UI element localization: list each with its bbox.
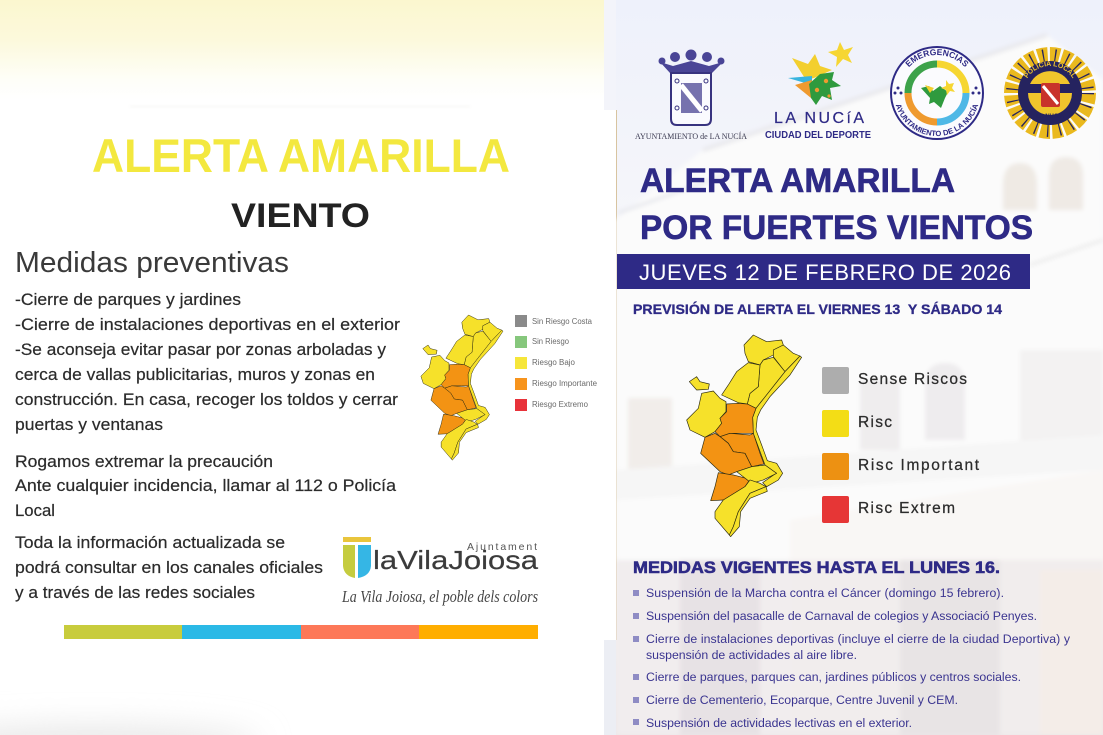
date banner [617, 254, 1030, 289]
measures list: suspensión de actividades al aire libre. [646, 648, 857, 662]
colour stripe [64, 625, 538, 639]
left map legend: Riesgo Extremo [532, 400, 589, 409]
logo: Emergencias badge: AYUNTAMIENTO DE LA NUCÍA [896, 105, 978, 136]
left map legend: Riesgo Importante [532, 379, 598, 388]
right map legend: Risc Extrem [858, 500, 955, 517]
left text block: official channels: y a través de las redes sociales [15, 584, 255, 602]
icon: shield [671, 73, 711, 125]
panel: left bottom grey shadow [0, 727, 260, 735]
left text block: measures list: -Cierre de parques y jardines [15, 291, 241, 309]
left map legend: Sin Riesgo Costa [532, 317, 593, 326]
right title: POR FUERTES VIENTOS [640, 209, 1033, 247]
icon: stars [788, 42, 853, 105]
measures list: Cierre de parques, parques can, jardines públicos y centros sociales. [646, 670, 1021, 684]
logo: Emergencias badge: EMERGENCIAS [905, 49, 968, 67]
logo: La Vila Joiosa: Ajuntament [467, 541, 537, 553]
left text block: measures list: cerca de vallas publicitarias, muros y zonas en [15, 366, 375, 384]
left text block: official channels: Toda la información actualizada se [15, 534, 285, 552]
logo: La Nucia ciudad del deporte [765, 42, 871, 141]
left text block: measures list [15, 291, 401, 434]
right title [640, 162, 1033, 247]
right map legend [822, 367, 980, 523]
logo: La Vila Joiosa: La Vila Joiosa, el poble dels colors [341, 587, 538, 606]
left text block: measures list: -Se aconseja evitar pasar por zonas arboladas y [15, 341, 387, 359]
left text block: official channels [15, 534, 323, 602]
measures list: Cierre de instalaciones deportivas (incluye el cierre de la ciudad Deportiva) y [646, 632, 1071, 646]
left text block: measures list: construcción. En casa, recoger los toldos y cerrar [15, 391, 399, 409]
measures list [633, 586, 1071, 730]
logo: Ayuntamiento de La Nucia crest: AYUNTAMIENTO de LA NUCÍA [635, 131, 747, 141]
measures list: Suspensión de la Marcha contra el Cáncer (domingo 15 febrero). [646, 586, 1004, 600]
logo: Policia Local badge [1004, 47, 1096, 139]
left title: alerta amarilla: ALERTA AMARILLA [92, 129, 510, 182]
left map legend: Sin Riesgo [532, 337, 570, 346]
logo: La Nucia ciudad del deporte: LA NUCíA [774, 110, 864, 127]
logo: La Vila Joiosa: laVilaJoiosa [373, 545, 539, 575]
measures list: Suspensión de actividades lectivas en el exterior. [646, 716, 912, 730]
forecast subheading: PREVISIÓN DE ALERTA EL VIERNES 13 Y SÁBADO 14 [633, 300, 1002, 317]
logo: Emergencias badge [890, 46, 984, 140]
logo: La Vila Joiosa [341, 537, 539, 606]
left text block: precaution: Local [15, 502, 55, 520]
panel: right building background [604, 0, 1103, 735]
icon: crown [658, 50, 724, 73]
left text block: precaution: Ante cualquier incidencia, llamar al 112 o Policía [15, 477, 397, 495]
right title: ALERTA AMARILLA [640, 162, 955, 200]
left text block: precaution: Rogamos extremar la precaución [15, 453, 273, 471]
left text block: measures list: -Cierre de instalaciones deportivas en el exterior [15, 316, 401, 334]
right map legend: Risc [858, 414, 892, 431]
left map: Comunitat Valenciana [421, 315, 503, 460]
left map legend: Riesgo Bajo [532, 358, 576, 367]
date banner: JUEVES 12 DE FEBRERO DE 2026 [639, 260, 1011, 285]
logo: La Nucia ciudad del deporte: CIUDAD DEL DEPORTE [765, 129, 871, 141]
logo: Ayuntamiento de La Nucia crest [635, 50, 747, 141]
logo: Policia Local badge: POLICIA LOCAL [1024, 61, 1076, 78]
icon: La Vila Joiosa shield [343, 537, 371, 578]
left text block: precaution [15, 453, 397, 520]
left map legend [515, 315, 598, 411]
left subtitle: viento: VIENTO [231, 197, 370, 235]
right map legend: Sense Riscos [858, 371, 967, 388]
right map: Comunitat Valenciana [687, 335, 802, 537]
panel: left yellow header blur [0, 0, 604, 108]
right map legend: Risc Important [858, 457, 980, 474]
measures list: Suspensión del pasacalle de Carnaval de colegios y Associació Penyes. [646, 609, 1037, 623]
left text block: measures list: puertas y ventanas [15, 416, 163, 434]
measures list: Cierre de Cementerio, Ecoparque, Centre Juvenil y CEM. [646, 693, 958, 707]
left text block: official channels: podrá consultar en los canales oficiales [15, 559, 323, 577]
left heading: medidas preventivas: Medidas preventivas [15, 247, 289, 279]
measures heading: MEDIDAS VIGENTES HASTA EL LUNES 16. [633, 558, 1000, 577]
logo: Policia Local badge: LA NUCIA [1036, 114, 1065, 120]
